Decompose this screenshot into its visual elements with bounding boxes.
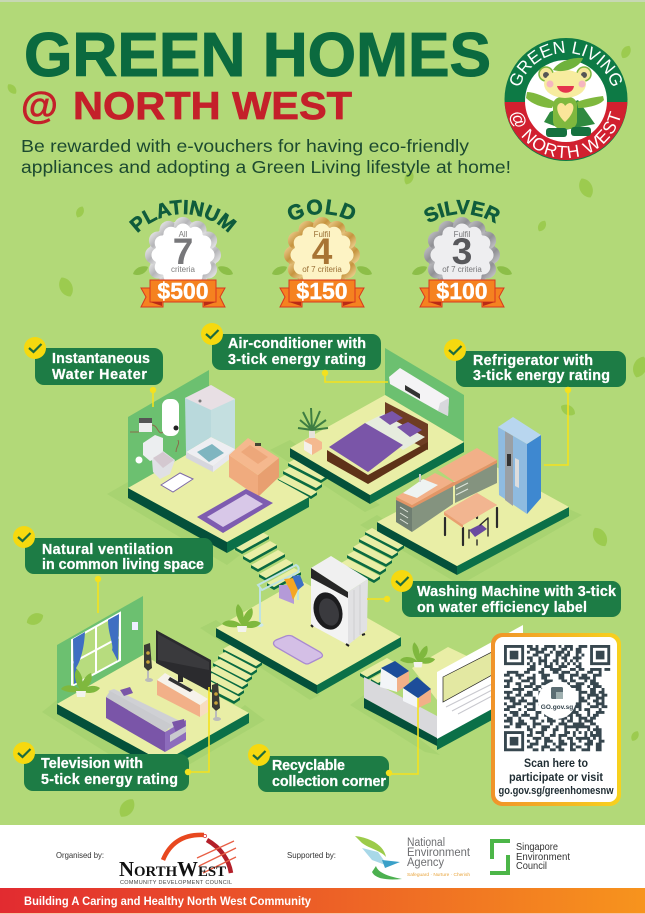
intro text [21,136,511,177]
title: @ [21,85,58,126]
clothes rack [256,565,304,627]
refrigerator [498,417,541,514]
badge: silver: $100 [436,278,488,304]
air conditioner [389,368,449,416]
callout: air-conditioner [201,323,381,376]
text: supported by: Supported by: [287,850,336,860]
logo: Singapore Environment Council: Environment [516,852,570,863]
window with curtains [72,613,138,686]
callout: air-conditioner: 3-tick energy rating [228,352,366,368]
icon: check [24,337,46,359]
callout: air-conditioner: Air-conditioner with [228,336,366,352]
recycling bins [380,661,431,708]
title [21,21,491,128]
title: GREEN HOMES [24,21,491,90]
intro text: appliances and adopting a Green Living lifestyle at home! [21,157,511,177]
vanity [229,438,279,497]
speaker left [144,643,153,682]
stairs: bathroom to bedroom [278,459,327,499]
room: bathroom [128,370,309,553]
icon: check [13,742,35,764]
logo: North West CDC: COMMUNITY DEVELOPMENT COUNCIL [120,880,232,886]
callout: recyclable corner [248,744,392,792]
speaker right [212,683,221,721]
logo: Green Living at North West mascot badge: GREEN LIVING [510,40,622,86]
callout: recyclable corner: Recyclable [272,758,345,774]
stairs: laundry to living room [201,645,262,704]
QR instructions [498,756,614,797]
footer: slogan bar: Building A Caring and Healthy North West Community [24,896,312,908]
panel: QR code card [491,633,621,806]
badge: silver: SILVER [424,200,500,224]
callout: washing machine [384,570,621,617]
badge: gold: $150 [296,278,348,304]
mascot frog [526,58,604,137]
purple rug [197,489,273,533]
room: recycling corner [364,625,523,750]
plant [61,669,100,697]
logo: North West CDC: NorthWest [119,857,226,881]
washing machine [309,556,368,646]
badge: silver: 3 [452,231,472,272]
QR centre logo: GO.gov.sg [541,704,573,711]
icon: check [13,526,35,548]
stairs: laundry to recycling corner [360,658,405,686]
badge: silver: of 7 criteria [442,265,482,274]
badge: gold: GOLD [288,199,356,220]
QR instructions: participate or visit [509,770,603,784]
logo: National Environment Agency [355,836,471,879]
sofa [106,687,186,752]
cabinets and counter [396,448,497,532]
logo: National Environment Agency: Environment [407,847,471,859]
badge: platinum: 7 [173,231,193,272]
QR instructions: Scan here to [524,756,588,770]
icon: check [444,339,466,361]
bed [327,402,428,484]
tv console [157,673,208,717]
callout: television [13,742,191,791]
shower [185,385,235,472]
callout: water heater [24,337,163,393]
badge: gold: of 7 criteria [302,265,342,274]
badge: platinum: $500 [157,278,209,304]
icon: check [248,744,270,766]
badge: gold: Fulfil [314,230,331,239]
logo: Singapore Environment Council: Singapore [516,842,558,853]
logo: Green Living at North West mascot badge: @ NORTH WEST [510,111,620,158]
QR instructions: go.gov.sg/greenhomesnw [498,785,614,797]
nightstand and plant [298,408,328,455]
callout: refrigerator: 3-tick energy rating [473,368,610,384]
badge: gold [272,199,372,308]
toilet [136,435,175,479]
footer: sponsors band [0,825,645,888]
dining table and chair [444,493,497,545]
callout: refrigerator: Refrigerator with [473,353,593,369]
intro text: Be rewarded with e-vouchers for having eco-friendly [21,136,469,156]
badge: platinum: PLATINUM [128,200,237,233]
callout: water heater: Water Heater [52,367,147,383]
recycling plant [400,642,435,667]
badge: platinum [128,200,237,308]
logo: National Environment Agency: Agency [407,857,444,869]
leader lines [98,373,568,774]
bath mat [161,473,193,492]
room: laundry [216,556,401,694]
room: living room [57,596,249,772]
stairs: bathroom to laundry [235,532,301,590]
logo: North West CDC [119,834,236,886]
logo: Singapore Environment Council: Council [516,861,547,872]
badge: silver: Fulfil [454,230,471,239]
icon: check [391,570,413,592]
icon: check [201,323,223,345]
television [156,630,211,692]
callout: recyclable corner: collection corner [272,774,386,790]
logo: National Environment Agency: Safeguard · Nurture · Cherish [407,872,471,877]
footer: slogan bar [0,888,645,914]
text: organised by: Organised by: [56,850,104,860]
callout: natural ventilation: Natural ventilation [42,542,173,558]
ground shadows [42,440,582,780]
QR centre logo [538,681,576,719]
callout: natural ventilation [13,526,213,582]
callout: natural ventilation: in common living space [42,557,204,573]
laundry mat [274,636,322,664]
callout: water heater: Instantaneous [52,351,150,367]
badge: platinum: criteria [171,265,196,274]
QR code [504,646,610,750]
stairs: kitchen to laundry [341,528,404,583]
callout: washing machine: Washing Machine with 3-tick [417,584,616,600]
logo: Singapore Environment Council [490,839,570,875]
title: NORTH WEST [73,85,352,128]
callout: television: 5-tick energy rating [41,772,178,788]
callout: washing machine: on water efficiency label [417,600,587,616]
badge: silver [412,200,512,308]
badge: platinum: All [179,230,188,239]
callout: television: Television with [41,756,143,772]
room: bedroom [290,348,464,504]
room: kitchen [377,417,569,575]
logo: National Environment Agency: National [407,837,445,849]
callout: refrigerator [444,339,626,393]
logo: Green Living at North West mascot badge [504,38,628,161]
badge: gold: 4 [312,231,333,272]
plant [222,604,261,632]
water heater [130,399,179,452]
